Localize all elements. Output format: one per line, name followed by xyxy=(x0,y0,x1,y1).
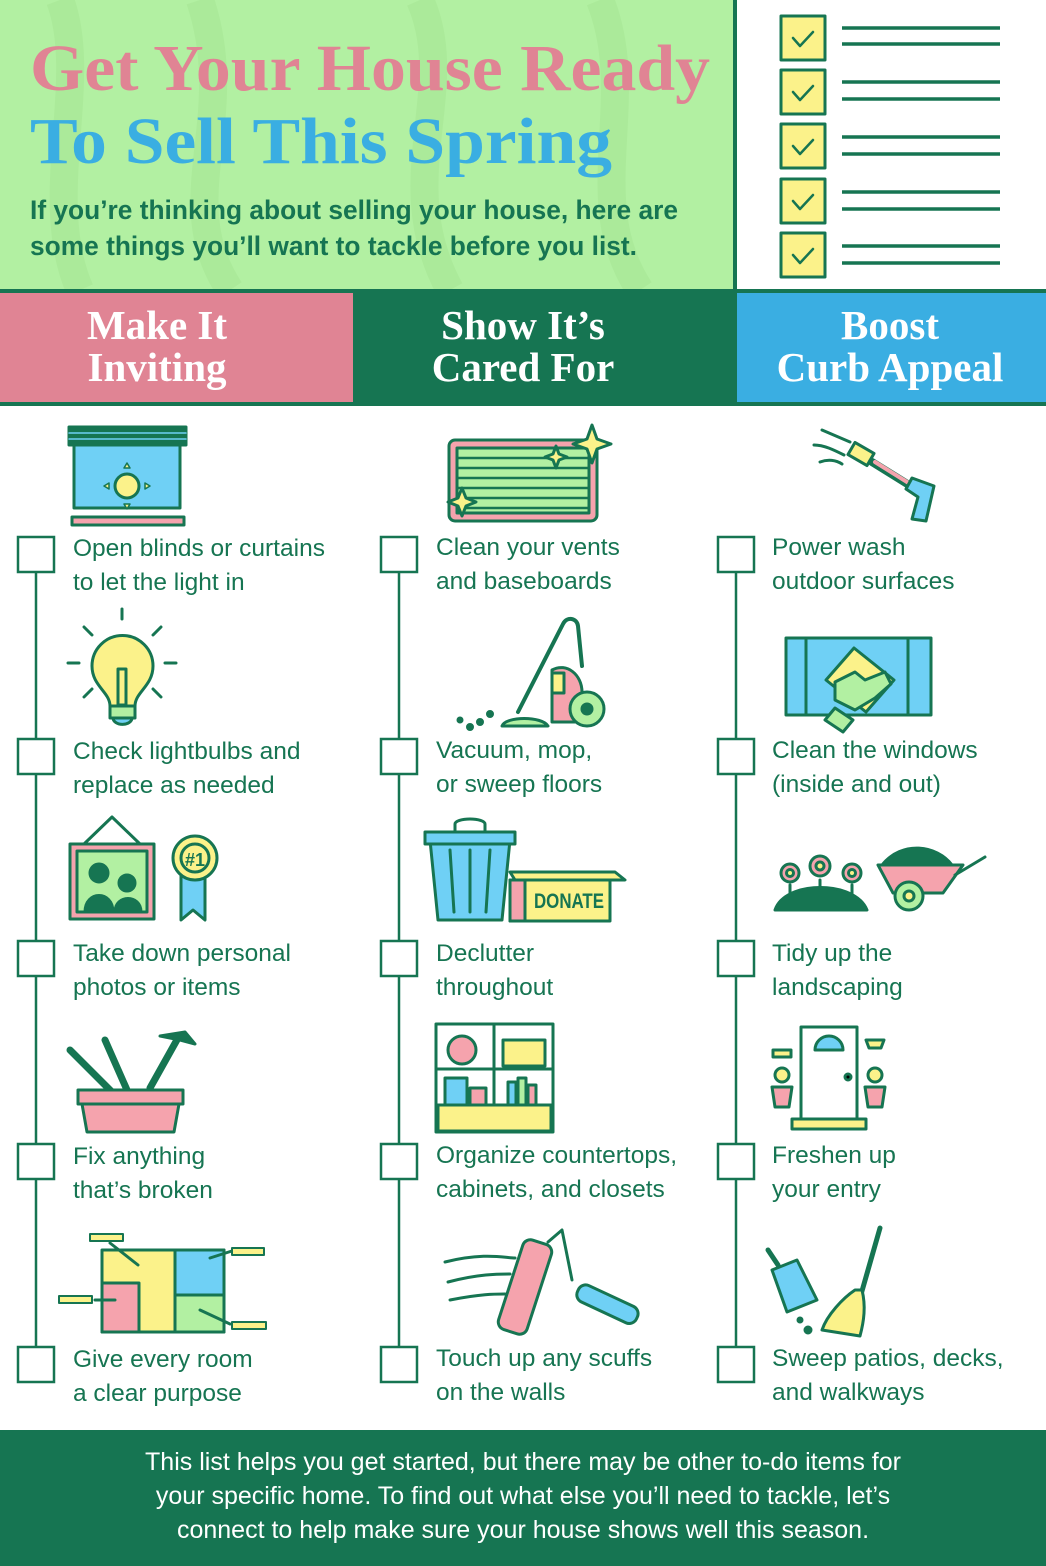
subtitle xyxy=(30,195,678,261)
column 1 texts: Take down personal xyxy=(73,940,291,967)
icon: vent xyxy=(448,425,611,521)
column 1 texts: a clear purpose xyxy=(73,1380,242,1407)
header background xyxy=(0,0,1046,293)
column 2 texts: Declutter xyxy=(436,940,534,967)
header: Make It Inviting: Make It xyxy=(87,302,227,348)
column 2 texts: throughout xyxy=(436,974,553,1001)
subtitle: If you’re thinking about selling your house, here are xyxy=(30,195,678,225)
icon: checklist xyxy=(781,16,1000,277)
icon: vacuum xyxy=(458,619,604,730)
timeline lines xyxy=(36,572,736,1347)
icon: photo and ribbon: #1 xyxy=(185,850,205,870)
footer xyxy=(0,1430,1046,1566)
icon: window blinds xyxy=(69,427,186,525)
column 2 texts: Organize countertops, xyxy=(436,1142,677,1169)
column 2 texts: and baseboards xyxy=(436,568,612,595)
header: Show It's Cared For: Cared For xyxy=(432,344,614,390)
column 1 texts: Open blinds or curtains xyxy=(73,535,325,562)
icon: shelves xyxy=(436,1024,553,1132)
column 3 texts: Freshen up xyxy=(772,1142,896,1169)
subtitle: some things you’ll want to tackle before you list. xyxy=(30,231,637,261)
column 3 texts: Sweep patios, decks, xyxy=(772,1345,1004,1372)
header: Show It's Cared For: Show It’s xyxy=(441,302,605,348)
header: Boost Curb Appeal: Curb Appeal xyxy=(777,344,1003,390)
column 3 texts: Tidy up the xyxy=(772,940,892,967)
column 3 texts xyxy=(772,534,1004,1406)
column 2 texts xyxy=(436,534,677,1406)
column 2 texts: Clean your vents xyxy=(436,534,620,561)
column 3 texts: and walkways xyxy=(772,1379,925,1406)
column 3 texts: your entry xyxy=(772,1176,882,1203)
checkboxes xyxy=(18,537,754,1382)
icon: entry door xyxy=(772,1027,885,1129)
column 2 texts: or sweep floors xyxy=(436,771,602,798)
icon: garden and wheelbarrow xyxy=(775,848,985,910)
icon: room plan xyxy=(59,1234,266,1332)
footer: connect to help make sure your house shows well this season. xyxy=(177,1516,869,1544)
icon: paint roller xyxy=(445,1230,641,1336)
icon: toolbox xyxy=(70,1032,195,1132)
column 1 texts: replace as needed xyxy=(73,772,275,799)
title: Get Your House Ready xyxy=(30,32,710,105)
column 3 texts: Power wash xyxy=(772,534,905,561)
icon: cleaning window xyxy=(786,638,931,732)
column 1 texts: photos or items xyxy=(73,974,240,1001)
column 1 texts xyxy=(73,535,325,1407)
title xyxy=(30,32,710,178)
icon: broom and dustpan xyxy=(768,1228,880,1336)
column 1 texts: Fix anything xyxy=(73,1143,205,1170)
column 1 texts: to let the light in xyxy=(73,569,245,596)
icon: trash and donate box: DONATE xyxy=(534,890,604,913)
header: Boost Curb Appeal: Boost xyxy=(841,302,939,348)
column 1 texts: Check lightbulbs and xyxy=(73,738,300,765)
header: Make It Inviting xyxy=(0,293,353,403)
column 1 texts: that’s broken xyxy=(73,1177,213,1204)
column 1 texts: Give every room xyxy=(73,1346,253,1373)
column 3 texts: (inside and out) xyxy=(772,771,941,798)
column 3 texts: Clean the windows xyxy=(772,737,978,764)
column 3 texts: outdoor surfaces xyxy=(772,568,954,595)
column 3 texts: landscaping xyxy=(772,974,903,1001)
column 2 texts: Vacuum, mop, xyxy=(436,737,592,764)
column 2 texts: on the walls xyxy=(436,1379,565,1406)
icon: lightbulb xyxy=(68,609,176,724)
column 2 texts: Touch up any scuffs xyxy=(436,1345,652,1372)
footer: your specific home. To find out what else you’ll need to tackle, let’s xyxy=(156,1482,890,1510)
header: Show It's Cared For xyxy=(353,293,737,403)
icon: photo and ribbon xyxy=(70,817,217,920)
footer: This list helps you get started, but there may be other to-do items for xyxy=(145,1448,901,1476)
icon: trash and donate box xyxy=(425,819,625,921)
icon: power washer xyxy=(814,430,934,521)
title: To Sell This Spring xyxy=(30,105,612,178)
header: Make It Inviting: Inviting xyxy=(88,344,227,390)
column 2 texts: cabinets, and closets xyxy=(436,1176,665,1203)
header: Boost Curb Appeal xyxy=(737,293,1046,403)
